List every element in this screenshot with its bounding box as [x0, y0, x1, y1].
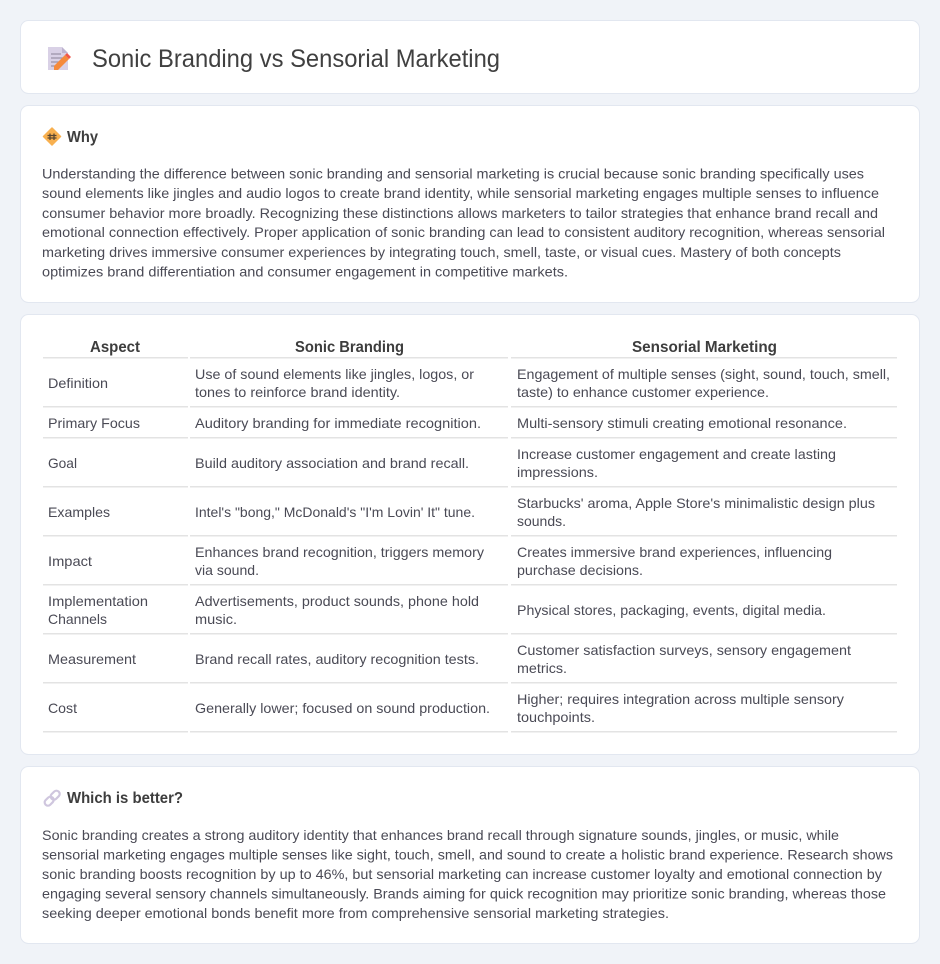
row: examples: Examples	[48, 504, 110, 520]
heading: why: Why	[67, 129, 98, 146]
icon: chain link	[43, 789, 61, 807]
text block: which is better paragraph: seeking deeper emotional bonds benefit more from comprehensive sensorial marketing strategies.	[42, 905, 669, 921]
row: cost: Cost	[48, 700, 77, 716]
row: impact	[48, 544, 832, 578]
row: primary focus: Auditory branding for immediate recognition.	[195, 415, 481, 431]
row: cost: Higher; requires integration across multiple sensory	[517, 691, 844, 707]
table header row: Sensorial Marketing	[632, 339, 777, 356]
row: impact: Impact	[48, 553, 92, 569]
row: goal: Increase customer engagement and create lasting	[517, 446, 836, 462]
text block: which is better paragraph: sensorial marketing engages multiple senses like sight, touch, smell, and sound to create a holistic brand experience. Research shows	[42, 846, 893, 862]
row: definition	[48, 366, 890, 400]
text block: which is better paragraph: Sonic branding creates a strong auditory identity that enhances brand recall through signature sounds, jingles, or music, while	[42, 827, 839, 843]
icon: document with pencil	[48, 47, 71, 70]
panel: which is better	[20, 766, 920, 944]
row: impact: Enhances brand recognition, triggers memory	[195, 544, 484, 560]
row: definition: Use of sound elements like jingles, logos, or	[195, 366, 474, 382]
row: impact: purchase decisions.	[517, 562, 643, 578]
table header row: Aspect	[90, 339, 141, 356]
panel: page header	[20, 20, 920, 94]
row: definition: tones to reinforce brand identity.	[195, 384, 400, 400]
heading: which is better: Which is better?	[67, 790, 183, 807]
text block: why paragraph: optimizes brand differentiation and consumer engagement in competitive markets.	[42, 264, 568, 280]
table header row	[90, 339, 777, 356]
icon: warning diamond	[44, 128, 60, 145]
text block: why paragraph	[42, 166, 885, 280]
row: primary focus: Primary Focus	[48, 415, 140, 431]
row: implementation channels: Implementation	[48, 593, 148, 609]
row: measurement: Measurement	[48, 651, 136, 667]
row: goal: Build auditory association and brand recall.	[195, 455, 469, 471]
row: goal	[48, 446, 836, 480]
text block: which is better paragraph: sonic branding boosts recognition by up to 46%, but sensorial marketing can increase customer loyalty and emotional connection by	[42, 866, 882, 882]
row: cost: Generally lower; focused on sound production.	[195, 700, 490, 716]
text block: why paragraph: sound elements like jingles and audio logos to create brand identity, while sensorial marketing engages multiple senses to influence	[42, 185, 879, 201]
row: cost	[48, 691, 844, 725]
row: measurement	[48, 642, 851, 676]
text block: why paragraph: Understanding the difference between sonic branding and sensorial marketing is crucial because sonic branding specifically uses	[42, 166, 864, 182]
text block: why paragraph: consumer behavior more broadly. Recognizing these distinctions allows marketers to tailor strategies that enhance brand recall and	[42, 205, 878, 221]
row: measurement: Customer satisfaction surveys, sensory engagement	[517, 642, 851, 658]
row: examples	[48, 495, 875, 529]
row: primary focus	[48, 415, 847, 431]
row: implementation channels: music.	[195, 611, 237, 627]
row: impact: Creates immersive brand experiences, influencing	[517, 544, 832, 560]
row: implementation channels: Channels	[48, 611, 107, 627]
row: examples: Starbucks' aroma, Apple Store's minimalistic design plus	[517, 495, 875, 511]
row: primary focus: Multi-sensory stimuli creating emotional resonance.	[517, 415, 847, 431]
row: definition: Definition	[48, 375, 108, 391]
text block: why paragraph: marketing drives immersive consumer experiences by integrating touch, smell, taste, or visual cues. Mastery of both concepts	[42, 244, 841, 260]
table header row: Sonic Branding	[295, 339, 404, 356]
row: implementation channels: Advertisements, product sounds, phone hold	[195, 593, 479, 609]
row: definition: taste) to enhance customer experience.	[517, 384, 769, 400]
row: measurement: Brand recall rates, auditory recognition tests.	[195, 651, 479, 667]
row: goal: impressions.	[517, 464, 598, 480]
row: examples: Intel's "bong," McDonald's "I'm Lovin' It" tune.	[195, 504, 475, 520]
row: impact: via sound.	[195, 562, 259, 578]
text block: which is better paragraph: engaging several sensory channels simultaneously. Brands aiming for quick recognition may prioritize sonic branding, whereas those	[42, 886, 886, 902]
text block: why paragraph: emotional connection effectively. Proper application of sonic branding can lead to consistent auditory recognition, whereas sensorial	[42, 224, 885, 240]
row: goal: Goal	[48, 455, 77, 471]
title: Sonic Branding vs Sensorial Marketing	[92, 45, 500, 73]
text block: which is better paragraph	[42, 827, 893, 921]
row: measurement: metrics.	[517, 660, 567, 676]
row: definition: Engagement of multiple senses (sight, sound, touch, smell,	[517, 366, 890, 382]
row: implementation channels: Physical stores, packaging, events, digital media.	[517, 602, 826, 618]
row: examples: sounds.	[517, 513, 566, 529]
panel: why	[20, 106, 920, 302]
row: cost: touchpoints.	[517, 709, 595, 725]
row: implementation channels	[48, 593, 826, 627]
panel: comparison table	[20, 314, 920, 754]
